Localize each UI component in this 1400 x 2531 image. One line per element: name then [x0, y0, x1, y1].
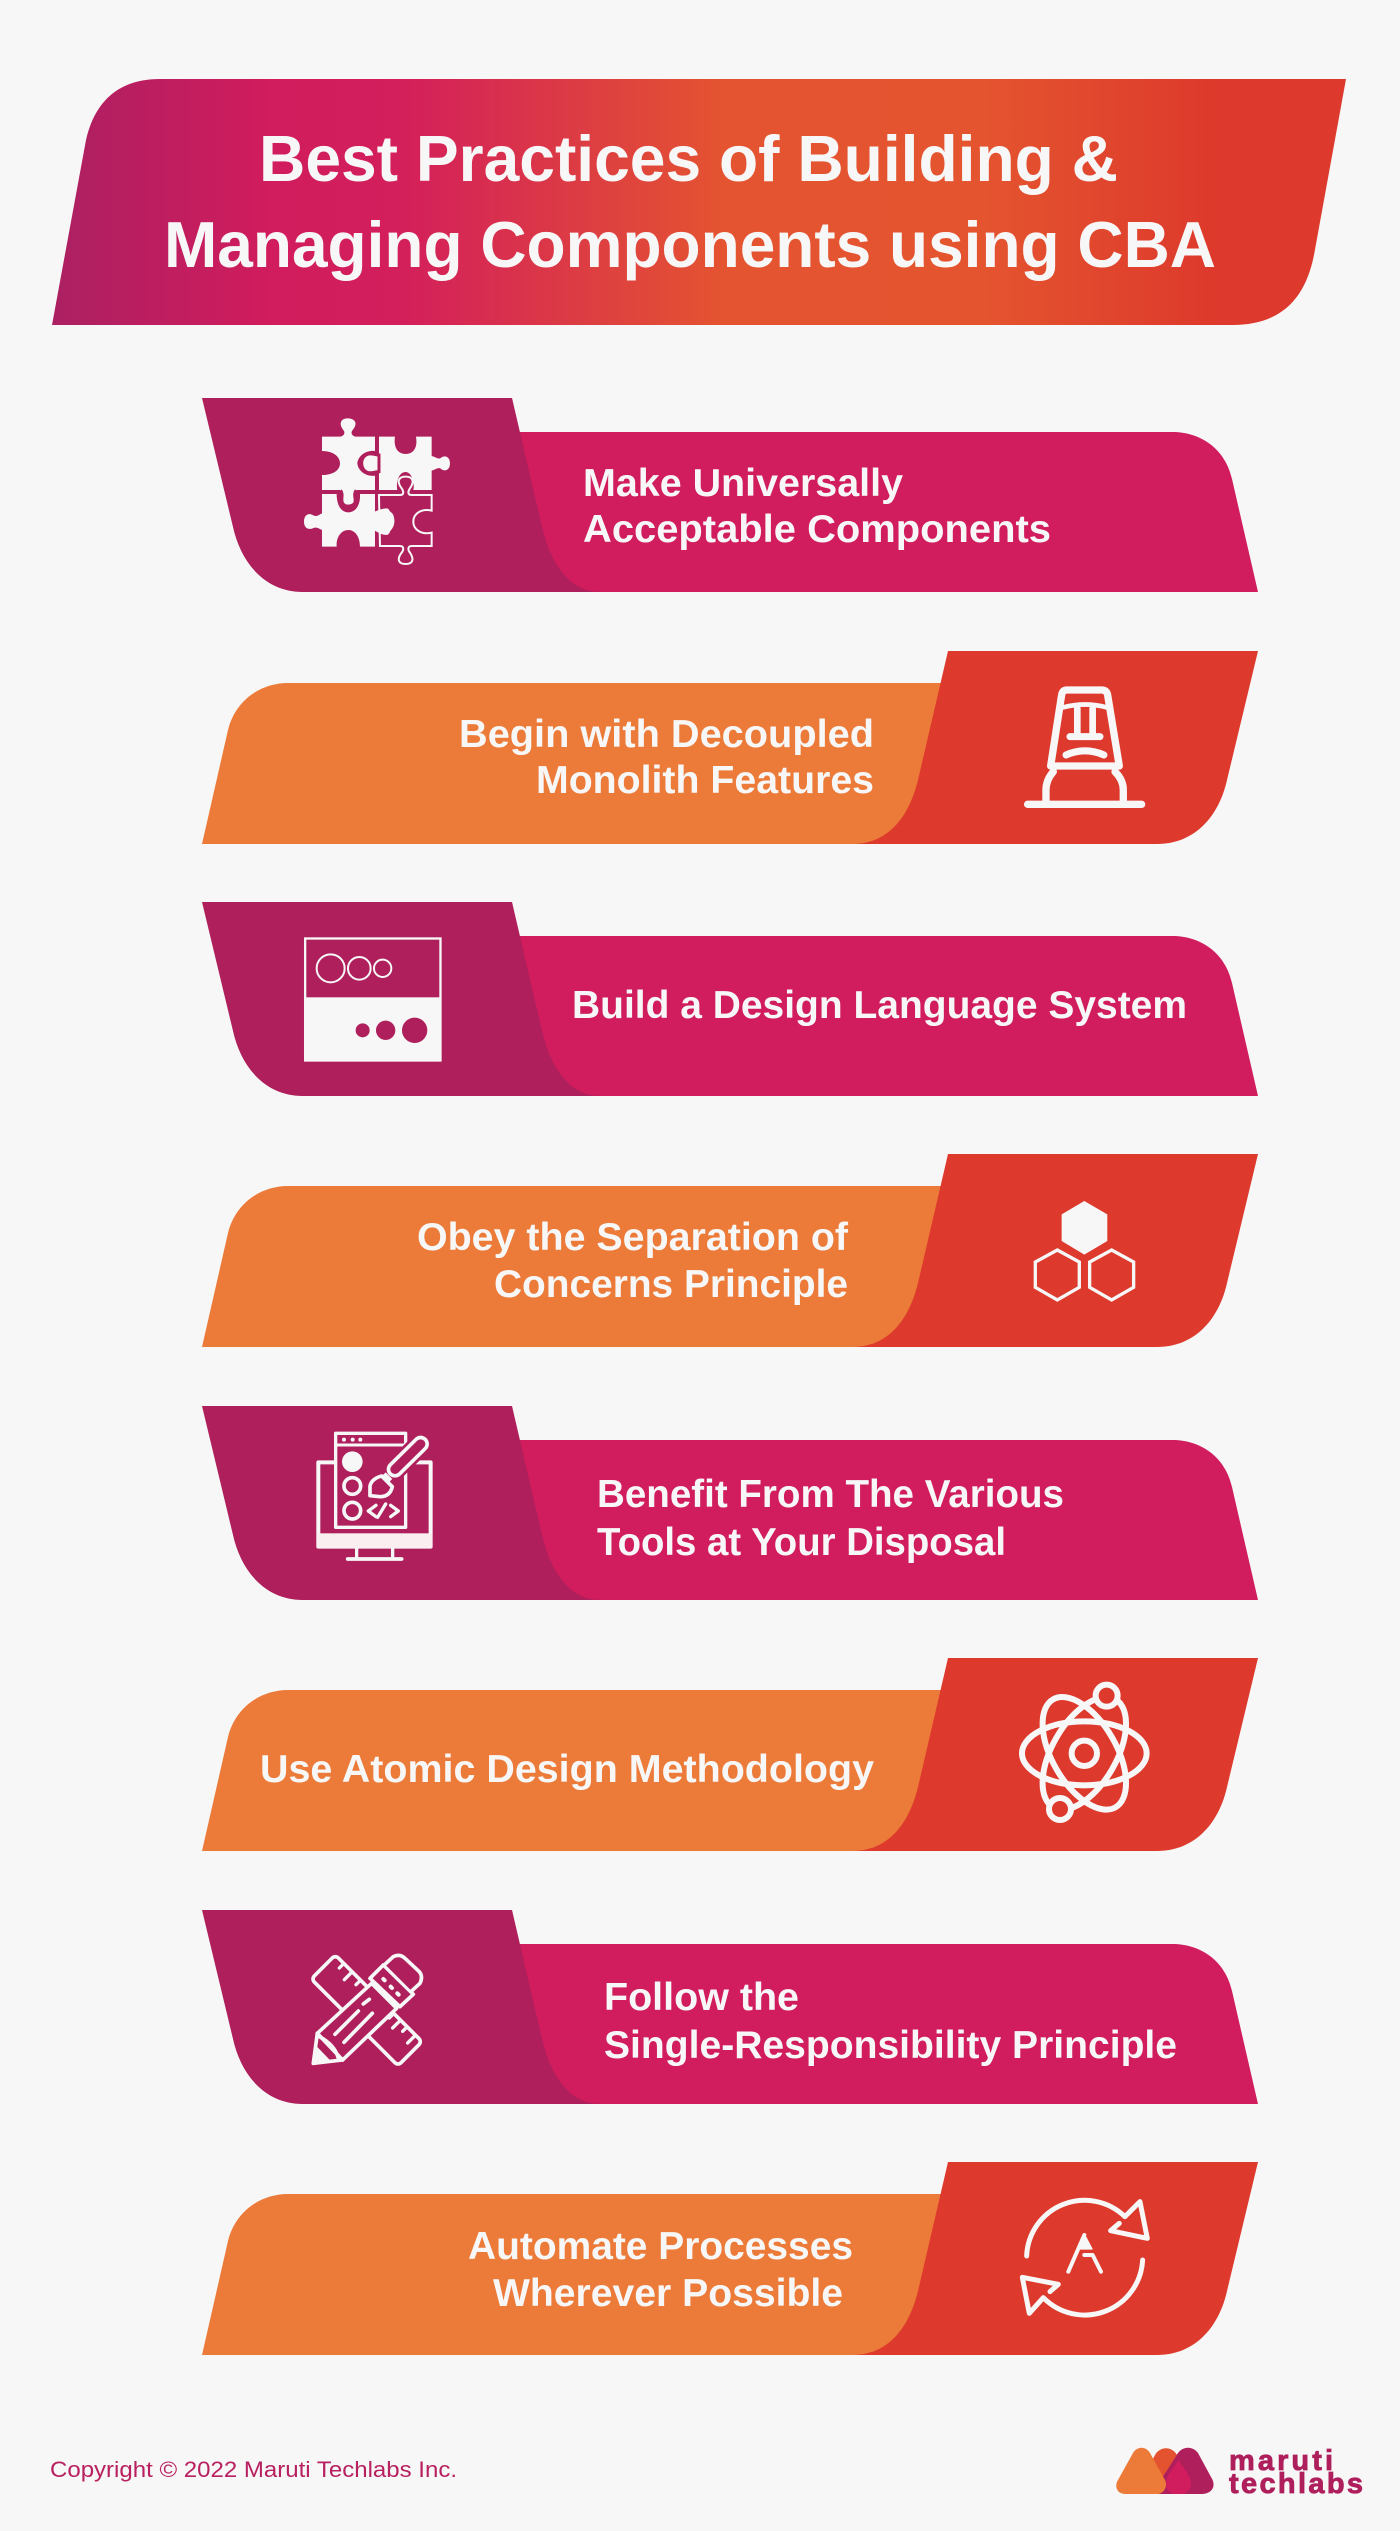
row 5: Benefit From The Various Tools at Your Disposal	[202, 1406, 1258, 1600]
row 3 text bar	[500, 936, 1258, 1096]
row 4 label: Obey the Separation of	[417, 1216, 849, 1259]
row 4 text bar	[202, 1186, 960, 1347]
row 7 text bar	[500, 1944, 1258, 2104]
row 3 icon tab	[202, 902, 600, 1096]
row 6: Use Atomic Design Methodology	[202, 1658, 1258, 1851]
row 3 label: Build a Design Language System	[572, 984, 1187, 1027]
row 1 icon tab	[202, 398, 600, 592]
row 2 text bar	[202, 683, 960, 844]
row 6 label: Use Atomic Design Methodology	[260, 1748, 874, 1791]
row 4 label: Concerns Principle	[494, 1263, 848, 1306]
row 3: Build a Design Language System	[202, 902, 1258, 1096]
row 2 icon tab	[853, 651, 1258, 844]
title heading: Best Practices of Building &	[259, 122, 1118, 195]
row 1 text bar	[500, 432, 1258, 592]
icon: design system window	[304, 937, 442, 1062]
row 2 label: Monolith Features	[536, 759, 874, 802]
row 5 icon tab	[202, 1406, 600, 1600]
icon: pencil and ruler	[311, 1955, 422, 2066]
row 7 label: Single-Responsibility Principle	[604, 2024, 1177, 2067]
icon: automation cycle	[1022, 2200, 1147, 2315]
row 2 label: Begin with Decoupled	[459, 713, 874, 756]
row 5 label: Tools at Your Disposal	[597, 1521, 1006, 1564]
icon: monitor with design tools	[317, 1433, 432, 1559]
logo wordmark: maruti	[1229, 2445, 1333, 2477]
logo wordmark: techlabs	[1229, 2468, 1363, 2500]
row 6 icon tab	[853, 1658, 1258, 1851]
row 4: Obey the Separation of Concerns Principle	[202, 1154, 1258, 1347]
row 5 label: Benefit From The Various	[597, 1473, 1064, 1516]
row 8 icon tab	[853, 2162, 1258, 2355]
row 8: Automate Processes Wherever Possible	[202, 2162, 1258, 2355]
row 6 text bar	[202, 1690, 960, 1851]
row 4 icon tab	[853, 1154, 1258, 1347]
row 1 label: Acceptable Components	[583, 508, 1051, 551]
icon: moai statue	[1028, 690, 1142, 804]
icon: puzzle	[304, 418, 450, 564]
row 8 text bar	[202, 2194, 960, 2355]
row 7 label: Follow the	[604, 1976, 799, 2019]
logo drops	[1116, 2448, 1214, 2494]
row 7: Follow the Single-Responsibility Principle	[202, 1910, 1258, 2104]
title banner shape	[52, 79, 1346, 325]
row 2: Begin with Decoupled Monolith Features	[202, 651, 1258, 844]
copyright footer: Copyright © 2022 Maruti Techlabs Inc.	[50, 2457, 457, 2482]
icon: hexagons	[1035, 1201, 1134, 1300]
icon: atom	[1022, 1683, 1147, 1823]
title banner	[52, 79, 1346, 325]
row 8 label: Wherever Possible	[493, 2272, 843, 2315]
row 7 icon tab	[202, 1910, 600, 2104]
row 5 text bar	[500, 1440, 1258, 1600]
row 8 label: Automate Processes	[468, 2225, 853, 2268]
logo: maruti techlabs	[1116, 2445, 1363, 2500]
row 1: Make Universally Acceptable Components	[202, 398, 1258, 592]
row 1 label: Make Universally	[583, 462, 903, 505]
title heading: Managing Components using CBA	[164, 208, 1216, 281]
